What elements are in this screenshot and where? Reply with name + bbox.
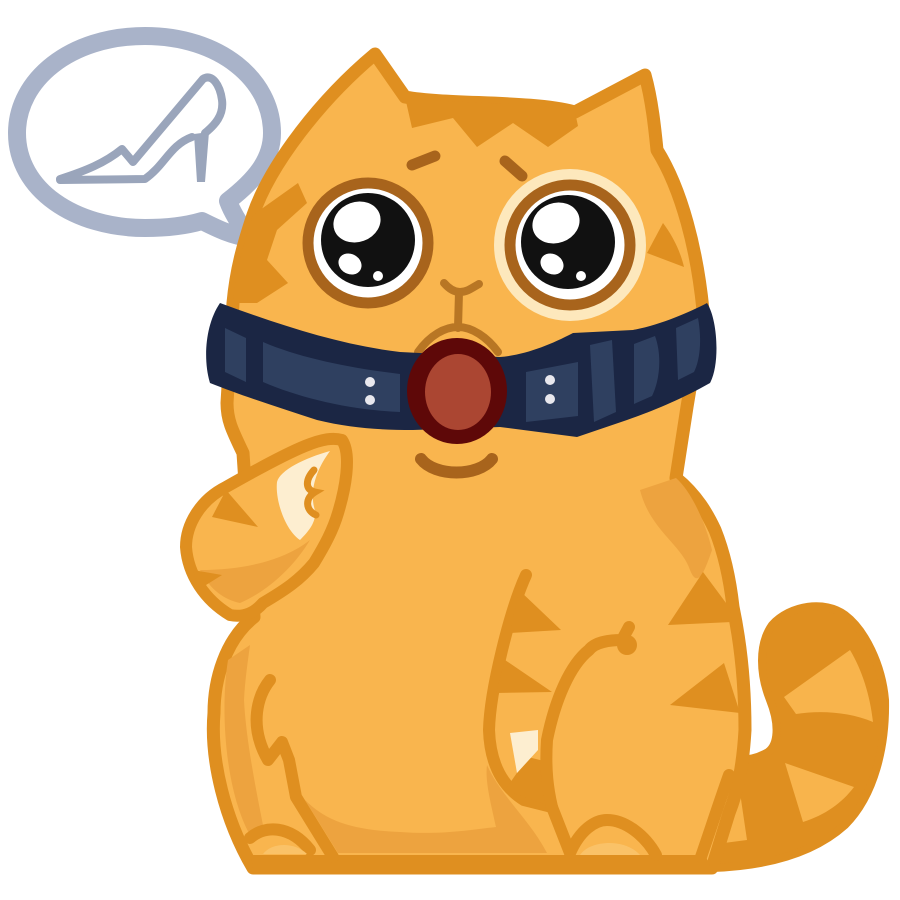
foot highlight	[263, 845, 307, 854]
left shadow	[224, 645, 264, 835]
small foreleg	[489, 575, 656, 855]
tail	[712, 606, 885, 868]
icon: right eye	[494, 169, 646, 321]
nose and mouth line	[418, 283, 498, 352]
smile	[421, 459, 492, 472]
cat body and head	[213, 54, 745, 870]
body shadow	[305, 765, 547, 853]
speech bubble with shoe icon	[17, 36, 272, 238]
head stripes	[233, 97, 740, 713]
icon: left eye	[308, 183, 428, 303]
side shadow	[640, 478, 712, 578]
tail light segments	[724, 650, 873, 843]
raised paw	[186, 439, 347, 616]
bottom band	[251, 855, 712, 870]
red ball	[407, 338, 507, 444]
body lines	[250, 680, 729, 857]
icon: high-heel shoe	[60, 77, 222, 182]
strap panels	[225, 318, 700, 422]
strap	[206, 303, 716, 444]
strap rivets	[365, 375, 555, 405]
eyebrows	[412, 156, 522, 176]
